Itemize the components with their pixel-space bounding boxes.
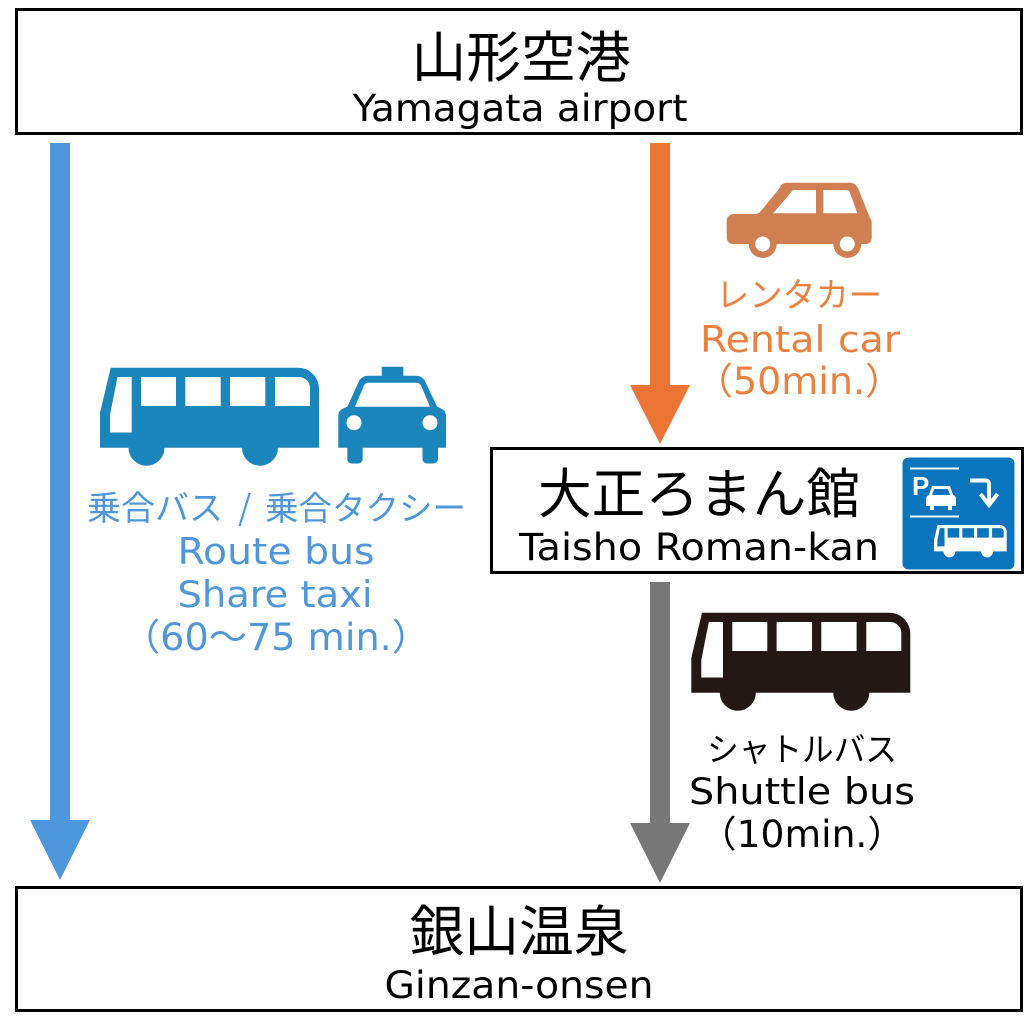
- label: shuttle bus: [689, 723, 915, 856]
- label: rental car: [695, 268, 903, 403]
- label: Japanese shuttle bus: シャトルバス: [707, 723, 897, 771]
- box: Ginzan-onsen: [16, 887, 1022, 1010]
- arrow: blue airport to Ginzan-onsen: [30, 143, 90, 880]
- label: Japanese bus and taxi: /: [238, 481, 251, 530]
- icon: park and ride sign: P: [912, 471, 929, 501]
- label: Route bus: Route bus: [178, 530, 374, 573]
- icon: route bus: [100, 368, 319, 466]
- icon: shuttle bus: [691, 613, 910, 711]
- heading: Taisho Roman-kan English: Taisho Roman-kan: [518, 525, 879, 569]
- label: 10 min: （10min.）: [699, 813, 905, 856]
- box: Yamagata airport: [16, 10, 1022, 134]
- label: 60 to 75 min: （60～75 min.）: [122, 616, 430, 659]
- heading: Yamagata airport Japanese: 山形空港: [412, 13, 630, 93]
- label: Share taxi: Share taxi: [178, 573, 372, 616]
- label: route bus and share taxi: [87, 481, 466, 659]
- heading: Yamagata airport English: Yamagata airport: [351, 86, 688, 130]
- label: Japanese rental car: レンタカー: [716, 268, 882, 317]
- label: Rental car: Rental car: [700, 318, 900, 361]
- icon: rental car: [727, 183, 872, 258]
- heading: Taisho Roman-kan Japanese: 大正ろまん館: [538, 450, 860, 529]
- arrow: orange airport to Taisho Roman-kan: [630, 143, 690, 444]
- box: Taisho Roman-kan: [492, 448, 1022, 572]
- heading: Ginzan-onsen Japanese: 銀山温泉: [410, 887, 628, 967]
- icon: park and ride sign: [902, 458, 1014, 570]
- icon: share taxi: [338, 367, 446, 464]
- label: 50 min: （50min.）: [695, 360, 903, 403]
- label: Japanese bus and taxi: 乗合バス: [87, 481, 223, 530]
- label: Shuttle bus: Shuttle bus: [689, 770, 915, 813]
- label: Japanese bus and taxi: 乗合タクシー: [265, 481, 466, 530]
- arrow: gray Taisho Roman-kan to Ginzan-onsen: [630, 582, 690, 883]
- heading: Ginzan-onsen English: Ginzan-onsen: [384, 963, 654, 1007]
